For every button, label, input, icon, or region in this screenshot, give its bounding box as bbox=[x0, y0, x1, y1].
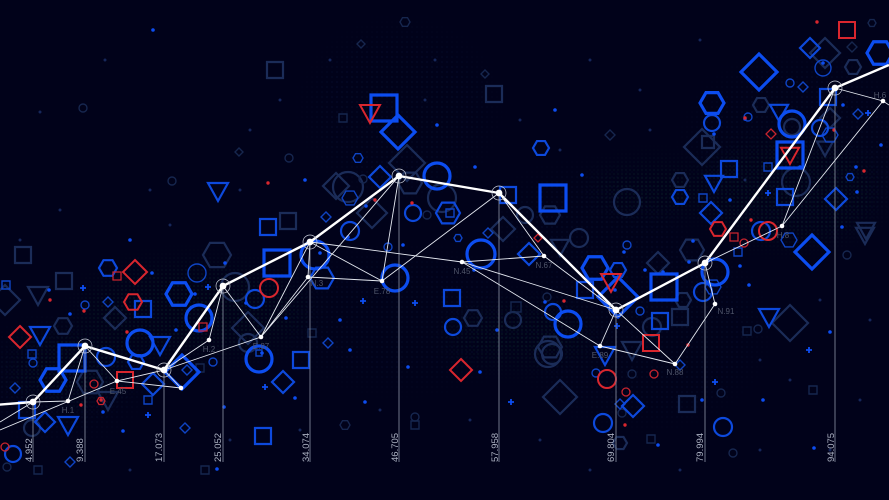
small red shapes bbox=[1, 129, 776, 451]
node labels: N.45 bbox=[454, 267, 471, 276]
axis values: 17.073 bbox=[154, 433, 165, 462]
red dots bbox=[50, 22, 864, 425]
axis values: 79.994 bbox=[695, 433, 706, 462]
axis values: 25.052 bbox=[213, 433, 224, 462]
axis values: 94.075 bbox=[826, 433, 837, 462]
axis values bbox=[24, 433, 837, 462]
axis values: 46.705 bbox=[390, 433, 401, 462]
axis values: 34.074 bbox=[301, 433, 312, 462]
axis values: 9.388 bbox=[75, 438, 86, 462]
axis values: 4.952 bbox=[24, 438, 35, 462]
thin blue shapes bbox=[2, 60, 863, 467]
secondary nodes bbox=[66, 99, 885, 403]
node labels: H.8 bbox=[777, 231, 790, 240]
node labels: N.67 bbox=[536, 261, 553, 270]
node labels: H.2 bbox=[203, 345, 216, 354]
axis values: 69.804 bbox=[606, 433, 617, 462]
node labels: N.91 bbox=[718, 307, 735, 316]
plus markers bbox=[80, 110, 871, 418]
node labels bbox=[62, 91, 887, 415]
node labels: E.78 bbox=[374, 287, 391, 296]
red shapes bbox=[9, 22, 855, 388]
vertical value guide lines bbox=[33, 88, 835, 462]
axis values: 57.958 bbox=[490, 433, 501, 462]
node labels: H.6 bbox=[874, 91, 887, 100]
main nodes bbox=[26, 81, 842, 409]
node labels: E.87 bbox=[253, 342, 270, 351]
node labels: E.89 bbox=[592, 351, 609, 360]
node labels: N.3 bbox=[311, 279, 324, 288]
bright blue shapes bbox=[40, 42, 889, 391]
node labels: H.1 bbox=[62, 406, 75, 415]
node labels: N.88 bbox=[667, 368, 684, 377]
thin network links bbox=[0, 88, 889, 430]
main data line bbox=[0, 65, 889, 405]
node labels: E.45 bbox=[110, 387, 127, 396]
